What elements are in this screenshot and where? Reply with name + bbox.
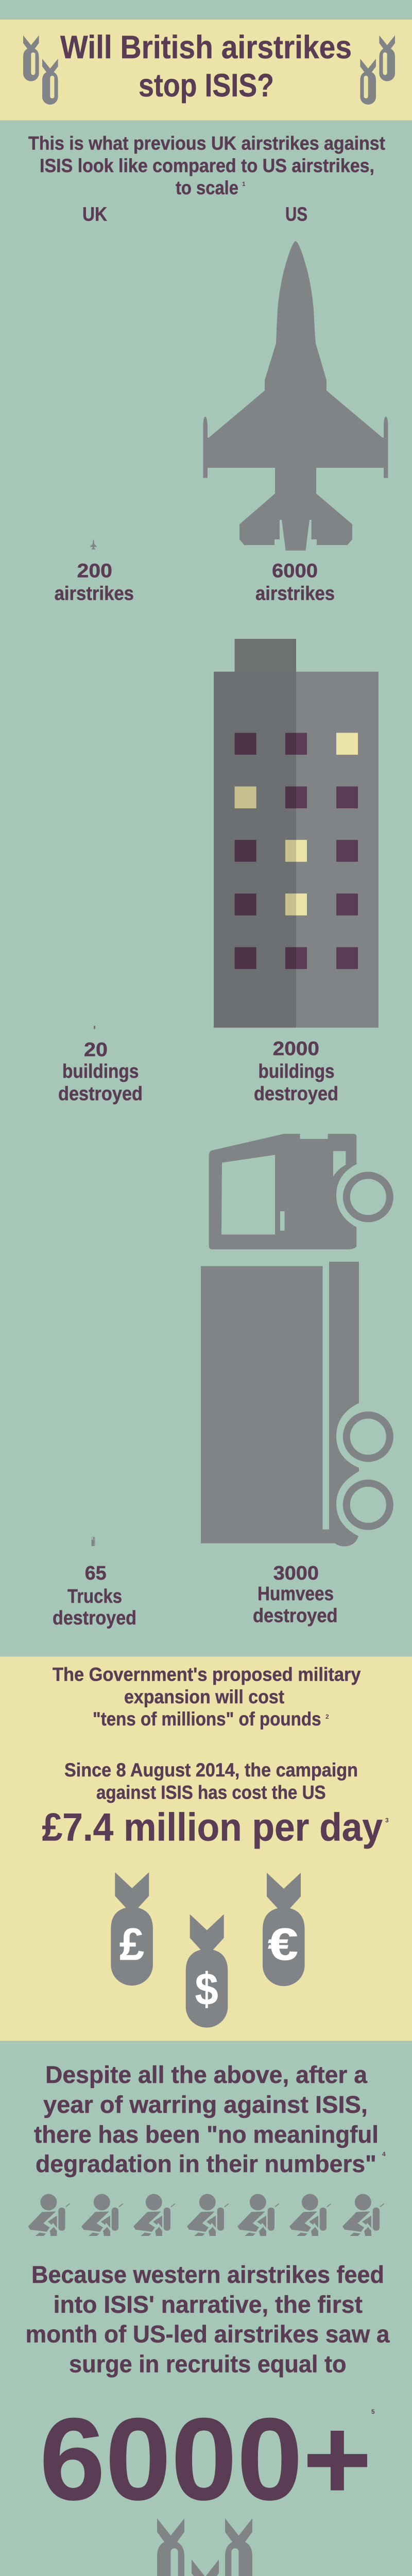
text: no meaningful degradation bbox=[34, 2061, 386, 2177]
stat: 2000 US buildings: destroyed bbox=[254, 1083, 338, 1105]
icon: large US jet bbox=[203, 241, 388, 551]
panel: cost bbox=[0, 1657, 412, 2041]
stat: 20 UK buildings: buildings bbox=[62, 1061, 139, 1082]
stat: 3000 US humvees bbox=[253, 1563, 338, 1627]
text: no meaningful degradation: year of warring against ISIS, bbox=[43, 2091, 368, 2118]
text: recruit surge: month of US-led airstrikes saw a bbox=[26, 2320, 390, 2347]
icon: dollar bomb bbox=[186, 1914, 228, 2028]
text: campaign cost: against ISIS has cost the US bbox=[96, 1782, 326, 1803]
stat: 65 UK trucks bbox=[53, 1563, 136, 1629]
stat: 65 UK trucks: destroyed bbox=[53, 1607, 136, 1629]
stat: 2000 US buildings bbox=[254, 1038, 338, 1105]
icon: euro bomb bbox=[263, 1873, 305, 1986]
icon: euro bomb: € bbox=[268, 1919, 298, 1970]
title: Will British airstrikes bbox=[60, 29, 352, 65]
stat: 2000 US buildings: buildings bbox=[259, 1061, 335, 1082]
text: proposed expansion cost: 2 bbox=[325, 1713, 329, 1720]
text: proposed expansion cost bbox=[53, 1664, 361, 1730]
stat: 6000+ recruits: 5 bbox=[371, 2408, 375, 2415]
stat: 65 UK trucks: Trucks bbox=[67, 1586, 122, 1607]
text: campaign cost bbox=[64, 1759, 358, 1803]
text: recruit surge: Because western airstrikes feed bbox=[31, 2261, 384, 2288]
icon: bombs left bbox=[23, 36, 58, 105]
icon: pound bomb bbox=[111, 1872, 153, 1986]
title bbox=[60, 29, 352, 104]
heading: UK vs US comparison: 1 bbox=[242, 180, 246, 188]
heading: UK vs US comparison: This is what previous UK airstrikes against bbox=[28, 133, 385, 154]
text: proposed expansion cost: The Government's proposed military bbox=[53, 1664, 361, 1685]
heading: UK vs US comparison bbox=[28, 133, 385, 198]
icon: large US building bbox=[214, 639, 379, 1028]
stat: 6000 US airstrikes: 6000 bbox=[272, 560, 318, 582]
text: proposed expansion cost: expansion will cost bbox=[124, 1686, 284, 1707]
stat: 65 UK trucks: 65 bbox=[85, 1563, 107, 1584]
icon: three bombs bbox=[157, 2518, 252, 2576]
panel: header band bbox=[0, 20, 412, 121]
icon: pound bomb: £ bbox=[119, 1919, 144, 1970]
stat: 200 UK airstrikes: 200 bbox=[77, 560, 112, 582]
heading: UK vs US comparison: ISIS look like compared to US airstrikes, bbox=[40, 155, 374, 176]
label: UK column: UK bbox=[82, 204, 107, 226]
stat: 2000 US buildings: 2000 bbox=[273, 1038, 319, 1060]
stat: 6000 US airstrikes bbox=[255, 560, 335, 605]
label: US column: US bbox=[285, 204, 307, 226]
stat: 6000 US airstrikes: airstrikes bbox=[255, 583, 335, 605]
icon: tiny UK jet bbox=[91, 539, 96, 550]
icon: dollar bomb: $ bbox=[195, 1963, 218, 2014]
text: no meaningful degradation: there has been "no meaningful bbox=[34, 2121, 379, 2148]
stat: 200 UK airstrikes: airstrikes bbox=[55, 583, 134, 605]
stat: 7.4 million per day: £7.4 million per day bbox=[42, 1806, 383, 1850]
stat: 3000 US humvees: destroyed bbox=[253, 1605, 338, 1627]
text: no meaningful degradation: 4 bbox=[382, 2150, 386, 2158]
stat: 200 UK airstrikes bbox=[55, 560, 134, 605]
icon: row of soldiers bbox=[28, 2194, 384, 2236]
stat: 6000+ recruits: 6000+ bbox=[39, 2394, 372, 2524]
heading: UK vs US comparison: to scale bbox=[176, 177, 238, 198]
stat: 3000 US humvees: 3000 bbox=[273, 1563, 319, 1584]
title: stop ISIS? bbox=[139, 67, 274, 104]
icon: tiny UK truck bbox=[91, 1537, 96, 1546]
stat: 20 UK buildings bbox=[58, 1039, 143, 1105]
icon: bombs right bbox=[360, 36, 395, 105]
stat: 7.4 million per day: 3 bbox=[385, 1817, 389, 1824]
icon: large US humvee bbox=[201, 1134, 390, 1547]
text: campaign cost: Since 8 August 2014, the campaign bbox=[64, 1759, 358, 1781]
stat: 20 UK buildings: 20 bbox=[84, 1039, 108, 1061]
text: no meaningful degradation: Despite all the above, after a bbox=[45, 2061, 368, 2088]
stat: 3000 US humvees: Humvees bbox=[258, 1583, 334, 1605]
text: recruit surge: surge in recruits equal to bbox=[69, 2350, 346, 2377]
text: proposed expansion cost: "tens of millions" of pounds bbox=[93, 1708, 321, 1730]
icon: tiny UK building bbox=[94, 1026, 95, 1029]
text: recruit surge: into ISIS' narrative, the first bbox=[54, 2291, 363, 2318]
stat: 20 UK buildings: destroyed bbox=[58, 1083, 143, 1105]
text: no meaningful degradation: degradation in their numbers" bbox=[36, 2150, 376, 2177]
text: recruit surge bbox=[26, 2261, 390, 2377]
